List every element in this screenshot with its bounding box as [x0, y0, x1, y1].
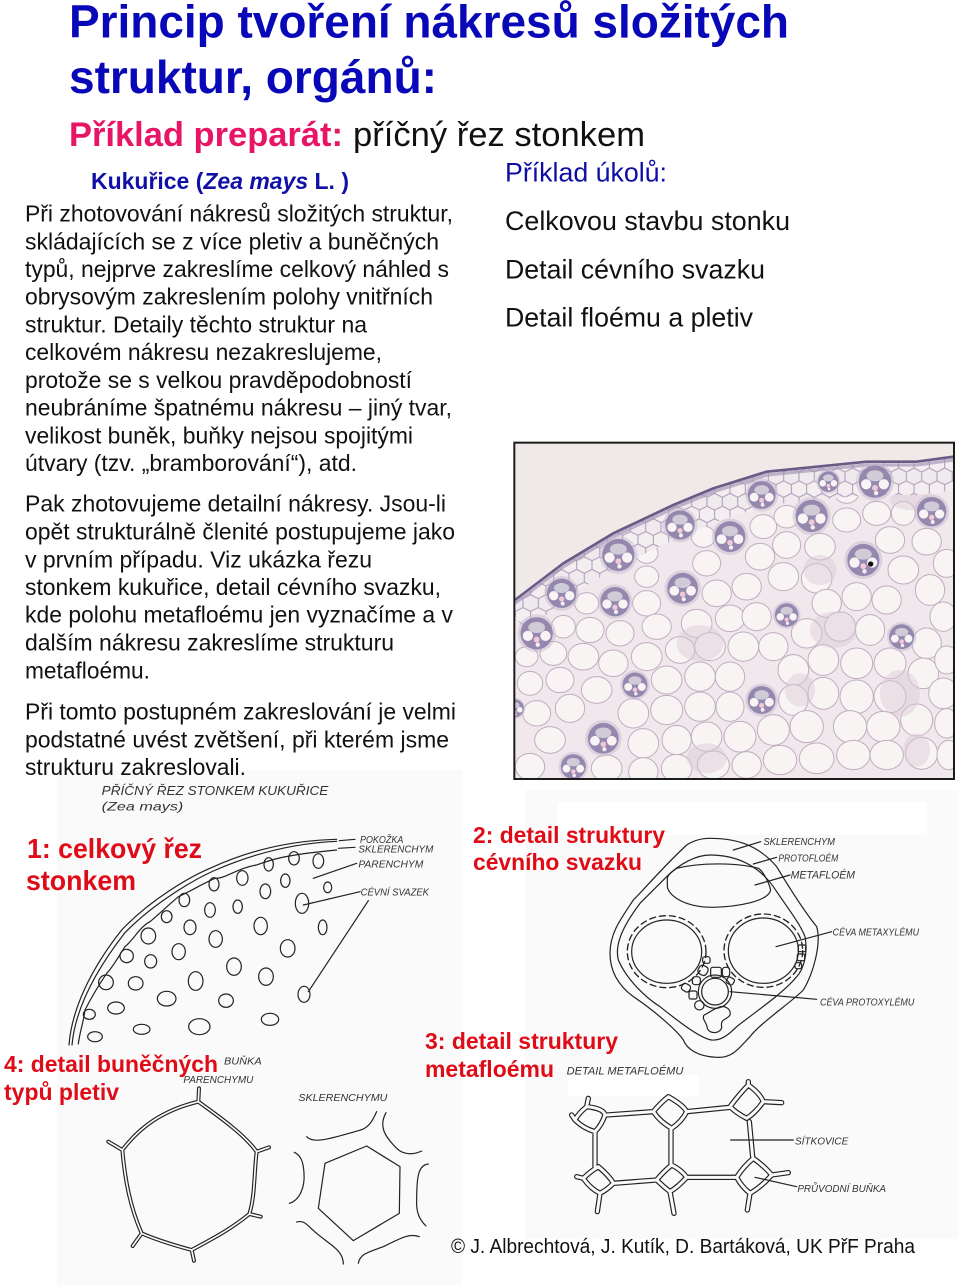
subtitle: example specimen: příčný řez stonkem [353, 116, 645, 154]
text block: detailed drawings [25, 491, 455, 683]
label 1: stonkem [26, 865, 136, 896]
text block: overview drawing: struktur. Detaily těchto struktur na [25, 311, 367, 337]
leader lines and tissue labels [303, 833, 434, 992]
label 4: 4: detail buněčných [4, 1051, 218, 1077]
text block: detailed drawings: kde polohu metafloému jen vyznačíme a v [25, 602, 453, 628]
parenchyma cells [515, 496, 953, 778]
label 1: 1: celkový řez [27, 833, 202, 864]
text block: detailed drawings: stonkem kukuřice, detail cévního svazku, [25, 574, 441, 600]
subtitle: example specimen [69, 116, 645, 154]
text block: detailed drawings: opět strukturálně členité postupujeme jako [25, 518, 455, 544]
white mask above drawing 2 [557, 802, 927, 835]
text block: detailed drawings: dalším nákresu zakreslíme strukturu [25, 630, 394, 656]
title: struktur, orgánů: [69, 51, 437, 103]
leader lines and labels [731, 1134, 886, 1195]
text block: overview drawing: velikost buněk, buňky nejsou spojitými [25, 422, 413, 448]
label 1 [26, 833, 202, 896]
text block: overview drawing: Při zhotovování nákresů složitých struktur, [25, 201, 453, 227]
white mask [568, 1075, 698, 1097]
text block: detailed drawings: Pak zhotovujeme detailní nákresy. Jsou-li [25, 491, 446, 517]
task list: Detail cévního svazku [505, 254, 765, 284]
text block: detailed drawings: metafloému. [25, 657, 150, 683]
label 3: 3: detail struktury [425, 1028, 618, 1054]
leader lines and tissue labels: PARENCHYM [358, 860, 424, 871]
text block: overview drawing: protože se s velkou pravděpodobností [25, 367, 413, 393]
label 3: metafloému [425, 1056, 554, 1082]
protoxylem and companion cells [680, 945, 806, 1033]
text block: overview drawing: neubráníme špatnému nákresu – jiný tvar, [25, 395, 452, 421]
task list: Detail floému a pletiv [505, 303, 753, 333]
metaxylem vessels [627, 914, 803, 988]
tinted parenchyma patches [677, 490, 930, 773]
title [69, 0, 789, 103]
drawing 3: metaphloem detail [567, 1064, 886, 1213]
species name: Kukuřice (Zea mays L. ) [91, 168, 349, 194]
label 4 [4, 1051, 218, 1105]
leader lines and labels: SÍTKOVICE [795, 1134, 848, 1147]
hand captions: SKLERENCHYMU [298, 1093, 388, 1104]
leader lines and labels [730, 837, 920, 1008]
hand caption [102, 783, 329, 814]
label 2 [473, 822, 665, 875]
subtitle: example specimen: Příklad preparát: [69, 116, 343, 154]
sclerenchyma cell [289, 1112, 428, 1264]
panel: drawing sheet right [525, 790, 958, 1239]
task list: Celkovou stavbu stonku [505, 206, 790, 236]
text block: magnification note: Při tomto postupném zakreslování je velmi [25, 698, 456, 724]
copyright: © J. Albrechtová, J. Kutík, D. Bartáková, UK PřF Praha [451, 1236, 916, 1258]
leader lines and labels: PROTOFLOÉM [778, 851, 839, 864]
hand captions: BUŇKA [224, 1054, 262, 1067]
label 4: typů pletiv [4, 1079, 119, 1105]
vascular bundles [83, 852, 332, 1042]
text block: magnification note: strukturu zakreslovali. [25, 754, 246, 780]
leader lines and labels: SKLERENCHYM [763, 837, 836, 848]
parenchyma cell [108, 1088, 269, 1261]
leader lines and tissue labels: POKOŽKA [360, 833, 404, 846]
task list [505, 158, 790, 333]
leader lines and labels: CÉVA PROTOXYLÉMU [820, 995, 915, 1008]
drawing 4: cell types [108, 1054, 428, 1264]
hand caption: (Zea mays) [102, 800, 183, 814]
leader lines and labels: METAFLOÉM [791, 869, 855, 882]
text block: magnification note: podstatné uvést zvětšení, při kterém jsme [25, 726, 449, 752]
text block: overview drawing [25, 201, 453, 476]
cell walls [572, 1082, 788, 1213]
text block: overview drawing: obrysovým zakreslením polohy vnitřních [25, 284, 433, 310]
hand caption: DETAIL METAFLOÉMU [567, 1064, 683, 1077]
leader lines and tissue labels: SKLERENCHYM [358, 844, 434, 855]
text block: overview drawing: útvary (tzv. „bramborování“), atd. [25, 450, 357, 476]
hand caption: PŘÍČNÝ ŘEZ STONKEM KUKUŘICE [102, 783, 329, 798]
text block: overview drawing: skládajících se z více pletiv a buněčných [25, 228, 439, 254]
label 2: 2: detail struktury [473, 822, 665, 848]
hand captions: PARENCHYMU [183, 1075, 254, 1086]
leader lines and labels: CÉVA METAXYLÉMU [833, 925, 920, 938]
label 3 [425, 1028, 618, 1082]
drawing 2: vascular bundle [610, 837, 920, 1057]
panel: drawing sheet left [57, 770, 462, 1285]
drawing 1: whole cross-section [69, 783, 434, 1045]
text block: magnification note [25, 698, 456, 780]
task list: Příklad úkolů: [505, 158, 667, 188]
text block: overview drawing: typů, nejprve zakreslíme celkový náhled s [25, 256, 449, 282]
micrograph: maize stem cross-section [505, 443, 960, 786]
label 2: cévního svazku [473, 849, 642, 875]
text block: detailed drawings: v prvním případu. Viz ukázka řezu [25, 546, 372, 572]
hand captions [183, 1054, 388, 1104]
leader lines and tissue labels: CÉVNÍ SVAZEK [361, 885, 430, 898]
text block: overview drawing: celkovém nákresu nezakreslujeme, [25, 339, 382, 365]
bundle outlines [610, 838, 818, 1057]
leader lines and labels: PRŮVODNÍ BUŇKA [797, 1181, 886, 1195]
stem outline [69, 839, 337, 1045]
